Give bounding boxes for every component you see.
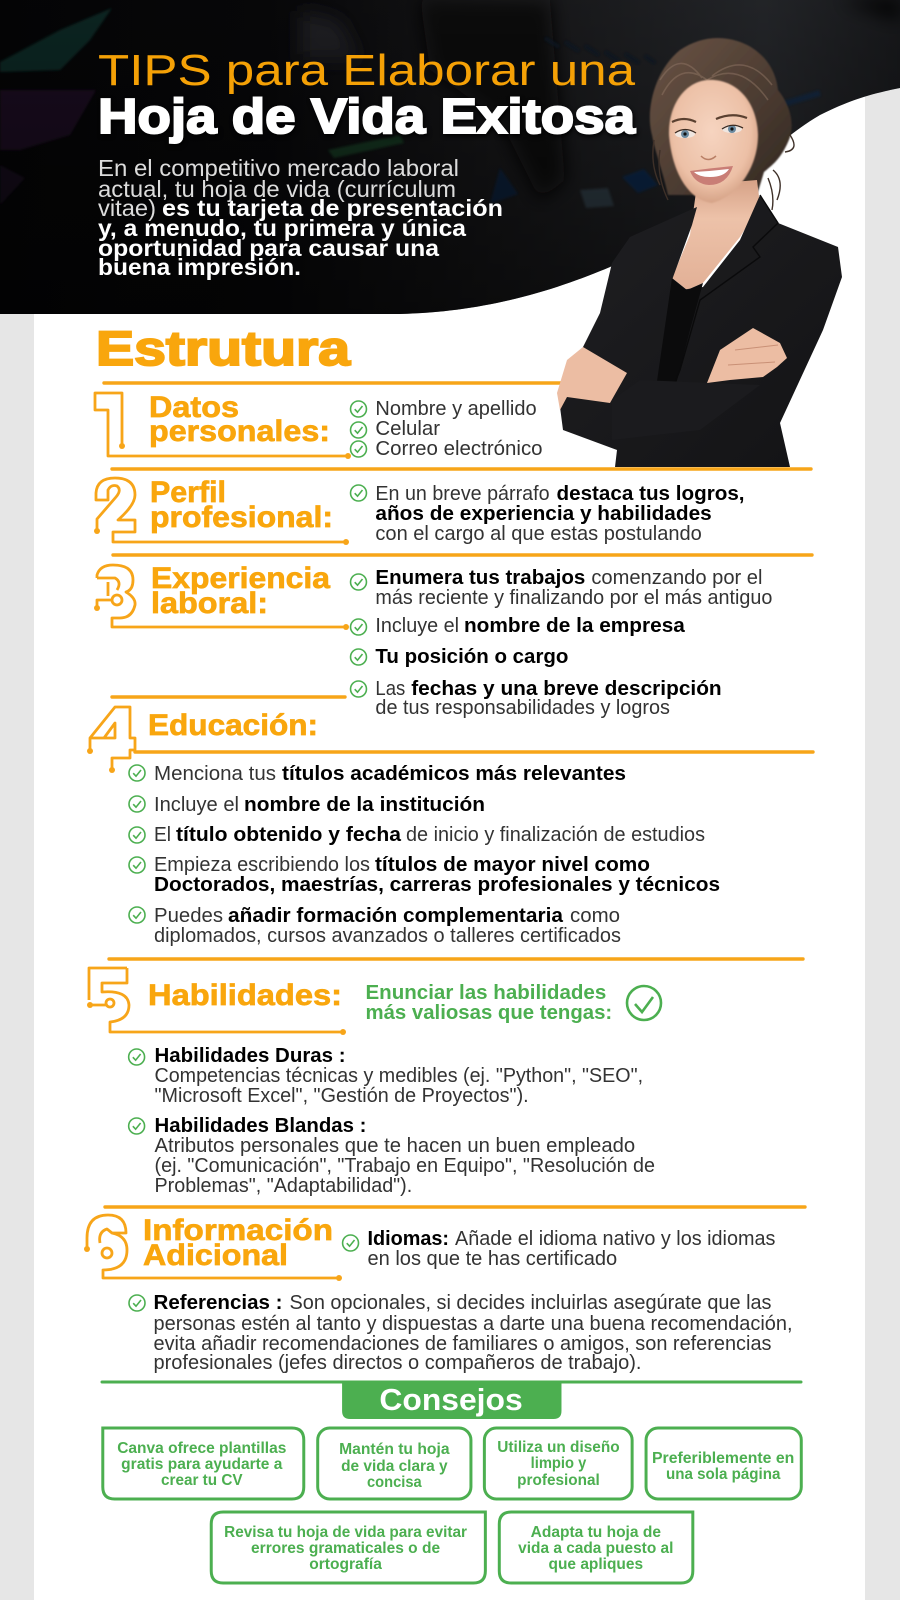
hard skills: Habilidades Duras : (155, 1045, 346, 1067)
tip card 2 (318, 1428, 471, 1499)
hair back (650, 38, 792, 195)
heading: Datos (149, 391, 239, 424)
section 2: Perfil profesional (94, 476, 745, 545)
list: más reciente y finalizando por el más antiguo (375, 587, 772, 609)
list: años de experiencia y habilidades (375, 503, 712, 525)
list: Incluye el (375, 615, 459, 637)
list: Tu posición o cargo (375, 646, 568, 668)
intro paragraph: buena impresión. (98, 254, 301, 280)
heading: personales: (149, 415, 330, 448)
intro paragraph (98, 155, 503, 280)
list: como (570, 905, 620, 927)
heading: Perfil (150, 476, 226, 509)
green callout: Enunciar las habilidades (365, 982, 606, 1004)
hard skills: Competencias técnicas y medibles (ej. "Python", "SEO", (155, 1065, 643, 1087)
heading: Estrutura: Estrutura (96, 323, 350, 376)
top orange rule behind portrait (104, 381, 570, 385)
heading (150, 476, 333, 534)
shirt (655, 278, 703, 400)
list (351, 567, 772, 719)
heading: Información (143, 1214, 333, 1247)
tip card 6: Adapta tu hoja de (531, 1524, 661, 1541)
eyes (675, 125, 743, 138)
nose (701, 156, 716, 160)
soft skills: Atributos personales que te hacen un buen empleado (155, 1135, 635, 1157)
banner: Consejos (342, 1382, 561, 1419)
list: Empieza escribiendo los (154, 854, 370, 876)
right hand (707, 328, 787, 383)
number 5 (87, 968, 346, 1035)
tip card 1: gratis para ayudarte a (121, 1456, 283, 1473)
tip card 1: crear tu CV (161, 1472, 243, 1489)
tip card 2: Mantén tu hoja (339, 1441, 450, 1458)
list: títulos de mayor nivel como (375, 854, 650, 876)
tip card 3: profesional (517, 1472, 600, 1489)
list: Las (375, 678, 405, 700)
rule (112, 467, 811, 471)
heading: profesional: (150, 501, 333, 534)
soft skills: Habilidades Blandas : (155, 1115, 366, 1137)
soft skills: Problemas", "Adaptabilidad"). (155, 1175, 412, 1197)
intro paragraph: y, a menudo, tu primera y única (98, 215, 467, 241)
hair strands (660, 63, 772, 100)
hard skills (129, 1045, 643, 1107)
portrait of smiling woman (557, 38, 842, 467)
dark header with blurred photo (0, 0, 900, 320)
smile (690, 166, 733, 185)
tip card 4: una sola página (666, 1466, 781, 1483)
green callout (365, 982, 612, 1024)
soft skills (129, 1115, 655, 1197)
heading (151, 562, 330, 620)
banner: Consejos: Consejos (379, 1382, 523, 1417)
brows (672, 115, 747, 122)
number 2 (94, 478, 349, 545)
intro paragraph: es tu tarjeta de presentación (162, 195, 503, 221)
list: comenzando por el (591, 567, 762, 589)
list: Menciona tus (154, 763, 276, 785)
tip card 1 (103, 1428, 304, 1499)
title (98, 46, 636, 144)
section 5: Habilidades (87, 968, 661, 1197)
list: Celular (375, 418, 440, 440)
intro paragraph: vitae) (98, 195, 156, 221)
lapel shading (668, 195, 778, 400)
tip card 5: errores gramaticales o de (251, 1540, 440, 1557)
list: de inicio y finalización de estudios (406, 824, 705, 846)
list: añadir formación complementaria (228, 905, 564, 927)
list: de tus responsabilidades y logros (375, 697, 670, 719)
rule (105, 1205, 805, 1209)
languages: Idiomas: (367, 1228, 449, 1250)
list: El (154, 824, 171, 846)
number 3 (94, 565, 349, 630)
tip card 1: Canva ofrece plantillas (117, 1440, 286, 1457)
list (129, 763, 720, 947)
section 4: Educación (87, 707, 813, 947)
face (669, 80, 758, 203)
tip card 5: ortografía (309, 1556, 382, 1573)
languages (343, 1228, 775, 1270)
list: Correo electrónico (375, 438, 543, 460)
section 6: Información adicional (84, 1214, 792, 1374)
heading (149, 391, 330, 448)
rule (109, 957, 803, 961)
heading: Educación: (148, 709, 318, 742)
neck and chest (672, 180, 760, 290)
number 4 (87, 707, 813, 773)
intro paragraph: oportunidad para causar una (98, 235, 440, 261)
list: diplomados, cursos avanzados o talleres certificados (154, 925, 621, 947)
rule (112, 695, 345, 699)
hard skills: "Microsoft Excel", "Gestión de Proyectos"). (155, 1085, 529, 1107)
tip card 5: Revisa tu hoja de vida para evitar (224, 1524, 467, 1541)
tip card 4: Preferiblemente en (652, 1450, 794, 1467)
panel: consejos (103, 1382, 801, 1583)
list: nombre de la institución (244, 794, 485, 816)
section 1: Datos personales (95, 391, 543, 460)
rule (113, 553, 812, 557)
list (351, 483, 745, 545)
number 6 (84, 1215, 342, 1281)
heading (143, 1214, 333, 1272)
intro paragraph: actual, tu hoja de vida (currículum (98, 176, 456, 202)
soft skills: (ej. "Comunicación", "Trabajo en Equipo", "Resolución de (155, 1155, 655, 1177)
references: evita añadir recomendaciones de familiares o amigos, son referencias (154, 1333, 772, 1355)
left hand (557, 347, 627, 410)
tip card 5 (211, 1512, 485, 1583)
references: Son opcionales, si decides incluirlas asegúrate que las (290, 1292, 772, 1314)
hair curls (653, 135, 794, 210)
list: Nombre y apellido (375, 398, 537, 420)
list: fechas y una breve descripción (411, 678, 722, 700)
green rule (102, 1380, 801, 1384)
tip card 2: concisa (367, 1474, 422, 1491)
title: Hoja de Vida Exitosa (98, 90, 636, 144)
heading: Experiencia (151, 562, 330, 595)
languages: Añade el idioma nativo y los idiomas (455, 1228, 775, 1250)
list: títulos académicos más relevantes (282, 763, 626, 785)
list: Enumera tus trabajos (375, 567, 585, 589)
heading: Habilidades: (148, 979, 342, 1012)
section 3: Experiencia laboral (94, 562, 772, 719)
languages: en los que te has certificado (367, 1248, 617, 1270)
list: Doctorados, maestrías, carreras profesionales y técnicos (154, 874, 720, 896)
icon: large check (627, 986, 661, 1020)
number 1 (95, 393, 351, 459)
tip card 3: Utiliza un diseño (497, 1439, 620, 1456)
tip card 6: vida a cada puesto al (518, 1540, 673, 1557)
list: nombre de la empresa (464, 615, 686, 637)
jacket (560, 195, 842, 467)
intro paragraph: En el competitivo mercado laboral (98, 155, 459, 181)
list: En un breve párrafo (375, 483, 550, 505)
heading: Adicional (143, 1239, 288, 1272)
tip card 6 (499, 1512, 693, 1583)
references: personas estén al tanto y dispuestas a darte una buena recomendación, (154, 1313, 792, 1335)
tip card 6: que apliques (549, 1556, 643, 1573)
heading: laboral: (151, 587, 268, 620)
list: Puedes (154, 905, 223, 927)
references: Referencias : (154, 1292, 282, 1314)
tip card 3: limpio y (531, 1455, 587, 1472)
list: con el cargo al que estas postulando (375, 523, 702, 545)
tip card 2: de vida clara y (341, 1458, 448, 1475)
green callout: más valiosas que tengas: (365, 1002, 612, 1024)
tip card 4 (646, 1428, 801, 1499)
title: TIPS para Elaborar una (98, 46, 636, 95)
tip card 3 (484, 1428, 632, 1499)
references (129, 1292, 792, 1374)
list: título obtenido y fecha (176, 824, 402, 846)
references: profesionales (jefes directos o compañeros de trabajo). (154, 1352, 642, 1374)
list: Incluye el (154, 794, 239, 816)
list: destaca tus logros, (557, 483, 745, 505)
list (351, 398, 543, 460)
